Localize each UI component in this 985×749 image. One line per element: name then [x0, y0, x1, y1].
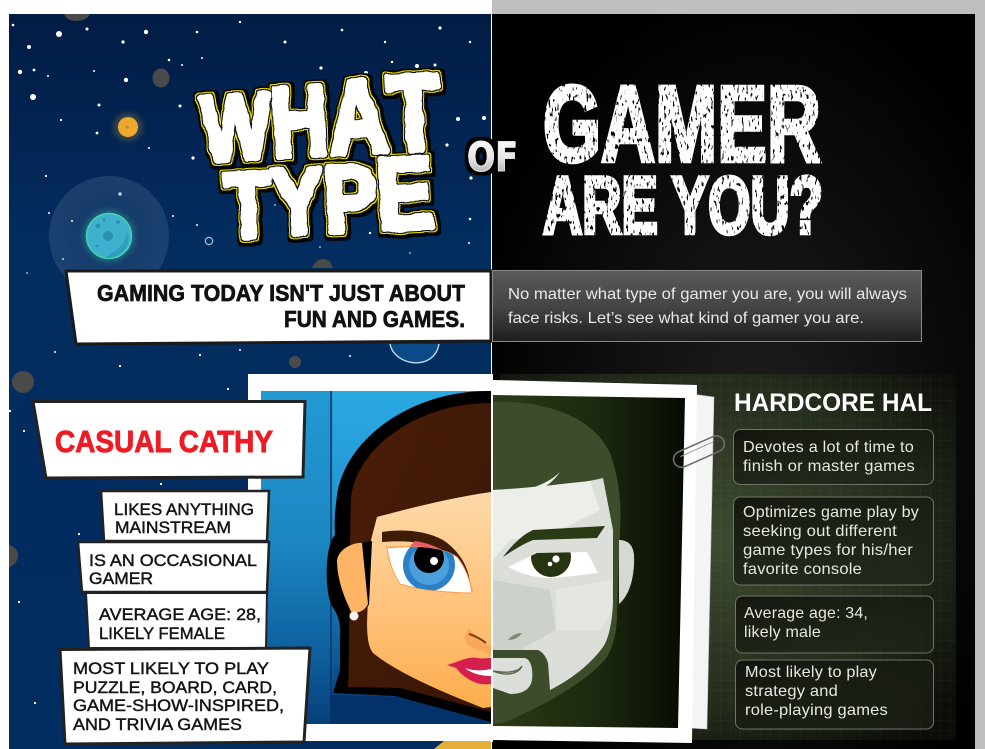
banner: gaming today	[66, 271, 491, 344]
card: optimizes game play: Optimizes game play by	[743, 504, 919, 521]
text block: average age: AVERAGE AGE: 28,	[99, 605, 261, 624]
title: gamer are you: GAMER	[543, 63, 821, 184]
card: devotes time: Devotes a lot of time to	[743, 439, 914, 456]
yellow planet at bottom edge	[434, 741, 491, 749]
icon: bubbles	[205, 237, 439, 363]
title: what type: TYPE	[221, 135, 437, 260]
title: gamer are you	[543, 63, 823, 251]
title: gamer are you: ARE YOU?	[543, 161, 823, 251]
card: optimizes game play	[734, 497, 934, 585]
text block: average age	[86, 593, 267, 648]
text block: most likely to play: AND TRIVIA GAMES	[73, 715, 242, 734]
text block: likes anything mainstream: LIKES ANYTHING	[114, 500, 254, 519]
icon: paperclip	[671, 433, 727, 470]
icon: teal planet	[49, 176, 169, 296]
card: optimizes game play: game types for his/her	[743, 542, 913, 559]
panel: dark background	[492, 14, 975, 749]
panel: hardcore hal portrait	[493, 380, 697, 743]
heading: casual cathy	[33, 402, 305, 478]
panel: casual cathy portrait	[248, 374, 491, 741]
banner: no matter what	[492, 270, 922, 342]
card: most likely to play: Most likely to play	[745, 664, 877, 681]
banner: gaming today: GAMING TODAY ISN'T JUST ABOUT	[97, 280, 465, 306]
text block: occasional gamer	[78, 542, 269, 592]
card: optimizes game play: favorite console	[743, 561, 862, 578]
card: devotes time	[734, 430, 934, 484]
card: most likely to play: strategy and	[745, 683, 838, 700]
heading: casual cathy: CASUAL CATHY	[55, 424, 273, 459]
card: average age: Average age: 34,	[744, 605, 868, 622]
title: what type	[198, 50, 443, 260]
title: what type: WHAT	[198, 50, 443, 184]
text block: most likely to play: GAME-SHOW-INSPIRED,	[73, 696, 284, 715]
icon: yellow planet	[114, 113, 142, 141]
banner: no matter what: face risks. Let’s see what kind of gamer you are.	[508, 310, 864, 327]
panel: grid background	[500, 374, 956, 740]
banner: no matter what: No matter what type of gamer you are, you will always	[508, 286, 907, 303]
card: devotes time: finish or master games	[743, 458, 915, 475]
title: of: OF	[467, 135, 518, 181]
text block: occasional gamer: IS AN OCCASIONAL	[89, 551, 257, 570]
banner: gaming today: FUN AND GAMES.	[284, 306, 465, 332]
text block: average age: LIKELY FEMALE	[99, 624, 225, 643]
text block: most likely to play: MOST LIKELY TO PLAY	[73, 659, 269, 678]
text block: likes anything mainstream	[101, 491, 269, 541]
card: average age	[736, 596, 934, 653]
icon: asteroids	[9, 14, 333, 567]
text block: most likely to play: PUZZLE, BOARD, CARD,	[73, 678, 277, 697]
divider	[491, 374, 493, 742]
card: average age: likely male	[744, 624, 821, 641]
card: optimizes game play: seeking out different	[743, 523, 897, 540]
text block: most likely to play	[60, 648, 310, 744]
icon: back photo sheet	[688, 394, 714, 729]
heading: hardcore hal: HARDCORE HAL	[734, 389, 932, 417]
card: most likely to play: role-playing games	[745, 702, 888, 719]
panel: space background	[9, 14, 491, 749]
card: most likely to play	[736, 660, 934, 729]
text block: occasional gamer: GAMER	[89, 569, 153, 588]
text block: likes anything mainstream: MAINSTREAM	[115, 518, 231, 537]
